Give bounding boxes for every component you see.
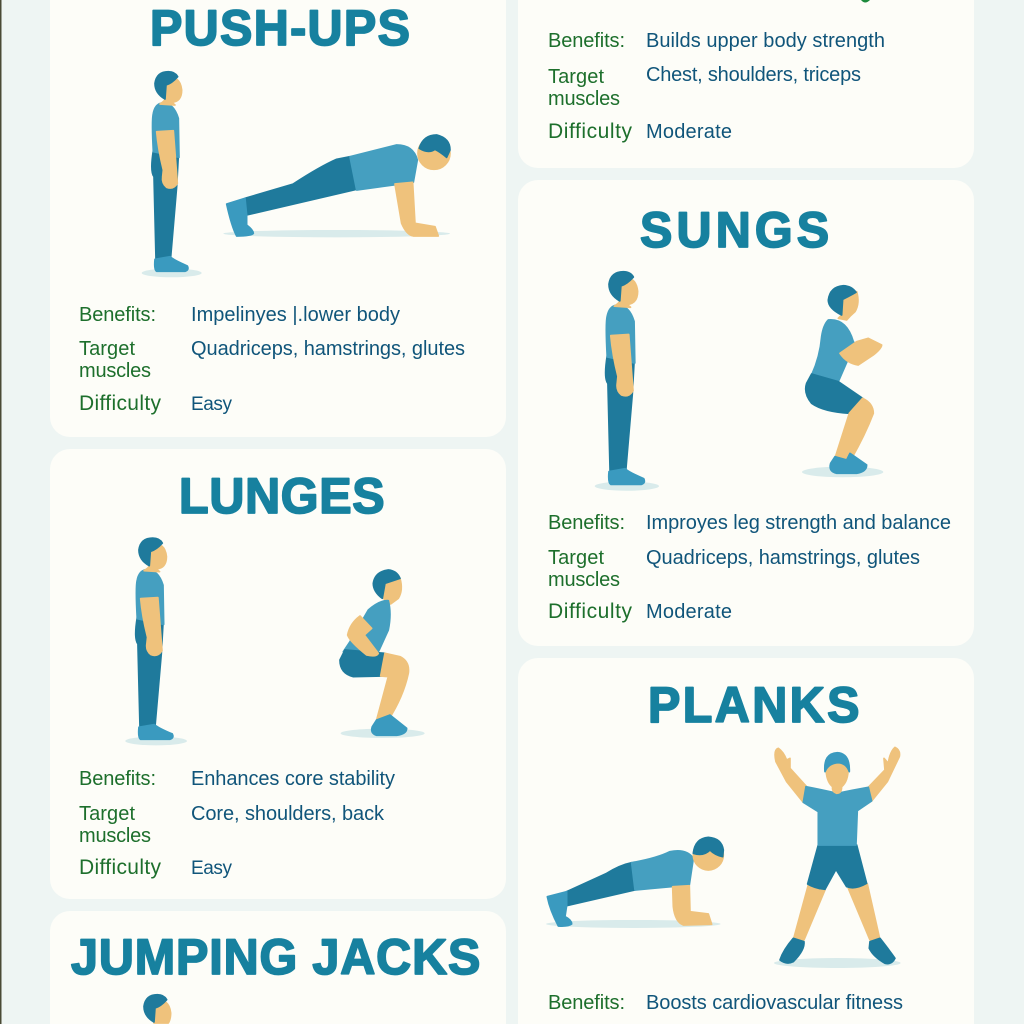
- text: sungs details: [548, 512, 951, 623]
- text: push-ups details: [79, 304, 465, 415]
- text: push-ups details: Quadriceps, hamstrings, glutes: [191, 338, 465, 360]
- figure: squat: [340, 570, 425, 738]
- text: top right details: Difficulty: [548, 120, 632, 143]
- text: top right details: Builds upper body strength: [646, 30, 885, 52]
- heading: jumping jacks: JUMPING JACKS: [71, 929, 480, 985]
- figure: standing: [125, 538, 187, 745]
- figure: standing head: [144, 995, 171, 1023]
- heading: lunges: LUNGES: [179, 468, 385, 524]
- text: push-ups details: Target: [79, 338, 135, 360]
- text: lunges details: [79, 768, 395, 879]
- figure: standing: [595, 272, 659, 491]
- figure: squat: [802, 286, 883, 477]
- text: lunges details: muscles: [79, 825, 151, 847]
- text: top right details: [548, 30, 885, 143]
- text: sungs details: Difficulty: [548, 600, 632, 623]
- figure: standing: [142, 72, 202, 277]
- text: planks details: Benefits:: [548, 992, 625, 1014]
- text: sungs details: muscles: [548, 569, 620, 591]
- text: push-ups details: Impelinyes |.lower body: [191, 304, 400, 326]
- text: sungs details: Moderate: [646, 601, 732, 623]
- text: push-ups details: Benefits:: [79, 304, 156, 326]
- text: planks details: Boosts cardiovascular fitness: [646, 992, 903, 1014]
- text: top right details: Target: [548, 66, 604, 88]
- panel: sungs: [518, 180, 974, 646]
- text: push-ups details: Difficulty: [79, 392, 162, 415]
- text: push-ups details: muscles: [79, 360, 151, 382]
- figure: push-up position: [223, 135, 450, 237]
- figure: plank: [546, 837, 723, 928]
- text: top right details: muscles: [548, 88, 620, 110]
- text: lunges details: Benefits:: [79, 768, 156, 790]
- text: push-ups details: Easy: [191, 394, 232, 415]
- text: sungs details: Benefits:: [548, 512, 625, 534]
- text: sungs details: Improyes leg strength and balance: [646, 512, 951, 534]
- text: sungs details: Quadriceps, hamstrings, glutes: [646, 547, 920, 569]
- text: top right details: Chest, shoulders, triceps: [646, 64, 861, 86]
- text: lunges details: Easy: [191, 858, 232, 879]
- heading: sungs: SUNGS: [640, 202, 829, 258]
- text: top right details: Moderate: [646, 121, 732, 143]
- text: lunges details: Target: [79, 803, 135, 825]
- text: lunges details: Enhances core stability: [191, 768, 395, 790]
- panel: planks: [518, 658, 974, 1024]
- figure: jumping jack: [774, 747, 901, 968]
- panel: jumping jacks: [50, 911, 506, 1024]
- panel: top right exercise: [518, 0, 974, 168]
- heading: push-ups: PUSH-UPS: [150, 0, 410, 56]
- panel: lunges: [50, 449, 506, 899]
- panel: push-ups: [50, 0, 506, 437]
- text: lunges details: Difficulty: [79, 856, 162, 879]
- heading: planks: PLANKS: [648, 677, 859, 733]
- text: sungs details: Target: [548, 547, 604, 569]
- text: top right details: Benefits:: [548, 30, 625, 52]
- text: lunges details: Core, shoulders, back: [191, 803, 385, 825]
